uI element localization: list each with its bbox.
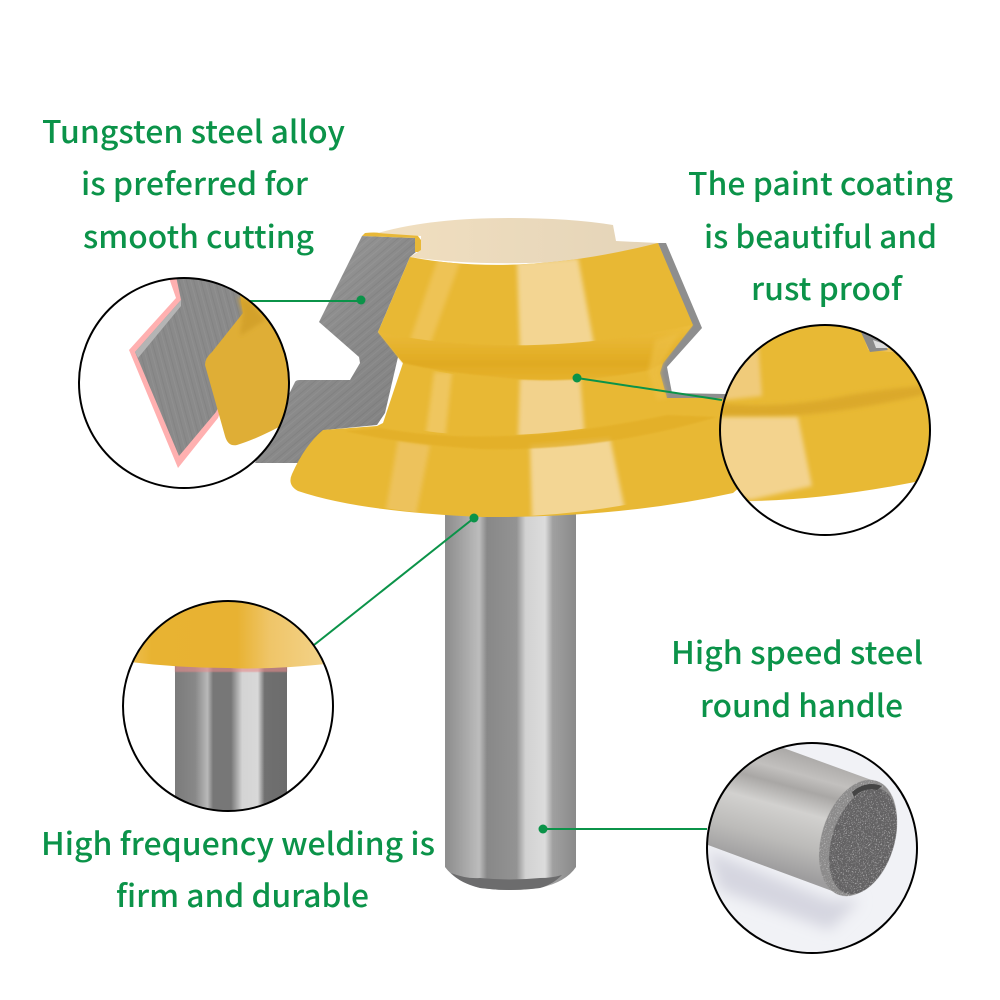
- callout: tungsten steel zoom circle: [129, 279, 288, 468]
- circle outline: handle: [707, 743, 917, 953]
- text: tungsten steel: [42, 107, 345, 257]
- text: welding: firm and durable: [116, 871, 369, 916]
- circle outline: tungsten: [79, 278, 289, 488]
- upper cone highlights: [410, 258, 595, 350]
- text: round handle: High speed steel: [671, 628, 923, 673]
- flange seam: [345, 415, 717, 449]
- text: round handle: round handle: [700, 681, 903, 726]
- flange highlights: [385, 438, 627, 520]
- shank: [445, 510, 576, 890]
- callout: welding zoom circle: [134, 602, 324, 810]
- callout: round handle zoom circle: [700, 743, 917, 953]
- callout: paint coating zoom circle: [721, 326, 929, 502]
- carbide cutter: left: [255, 232, 421, 463]
- text: tungsten steel: is preferred for: [81, 159, 308, 204]
- text: paint coating: [688, 159, 953, 309]
- leader line: paint coating: [572, 374, 722, 400]
- text: paint coating: rust proof: [751, 264, 903, 309]
- lower cone highlights: [425, 372, 585, 440]
- text: welding: High frequency welding is: [41, 819, 435, 864]
- circle outline: welding: [123, 601, 333, 811]
- text: paint coating: is beautiful and: [704, 212, 937, 257]
- leader line: tungsten steel: [250, 296, 366, 304]
- yellow body: [290, 218, 760, 520]
- infographic: router bit: [43, 118, 952, 954]
- leader line: welding: [314, 514, 478, 645]
- shank end chamfer: [451, 873, 562, 890]
- right groove facet: [648, 332, 680, 400]
- circle outline: paint: [720, 325, 930, 535]
- text: tungsten steel: smooth cutting: [83, 212, 314, 257]
- text: tungsten steel: Tungsten steel alloy: [42, 107, 345, 152]
- body silhouette: [290, 243, 760, 517]
- leader line: handle: [538, 824, 707, 834]
- text: welding: [41, 819, 435, 916]
- carbide cutter: right: [650, 243, 725, 402]
- top cream face: [378, 218, 658, 263]
- text: paint coating: The paint coating: [688, 159, 953, 204]
- groove: [378, 325, 693, 380]
- text: round handle: [671, 628, 923, 726]
